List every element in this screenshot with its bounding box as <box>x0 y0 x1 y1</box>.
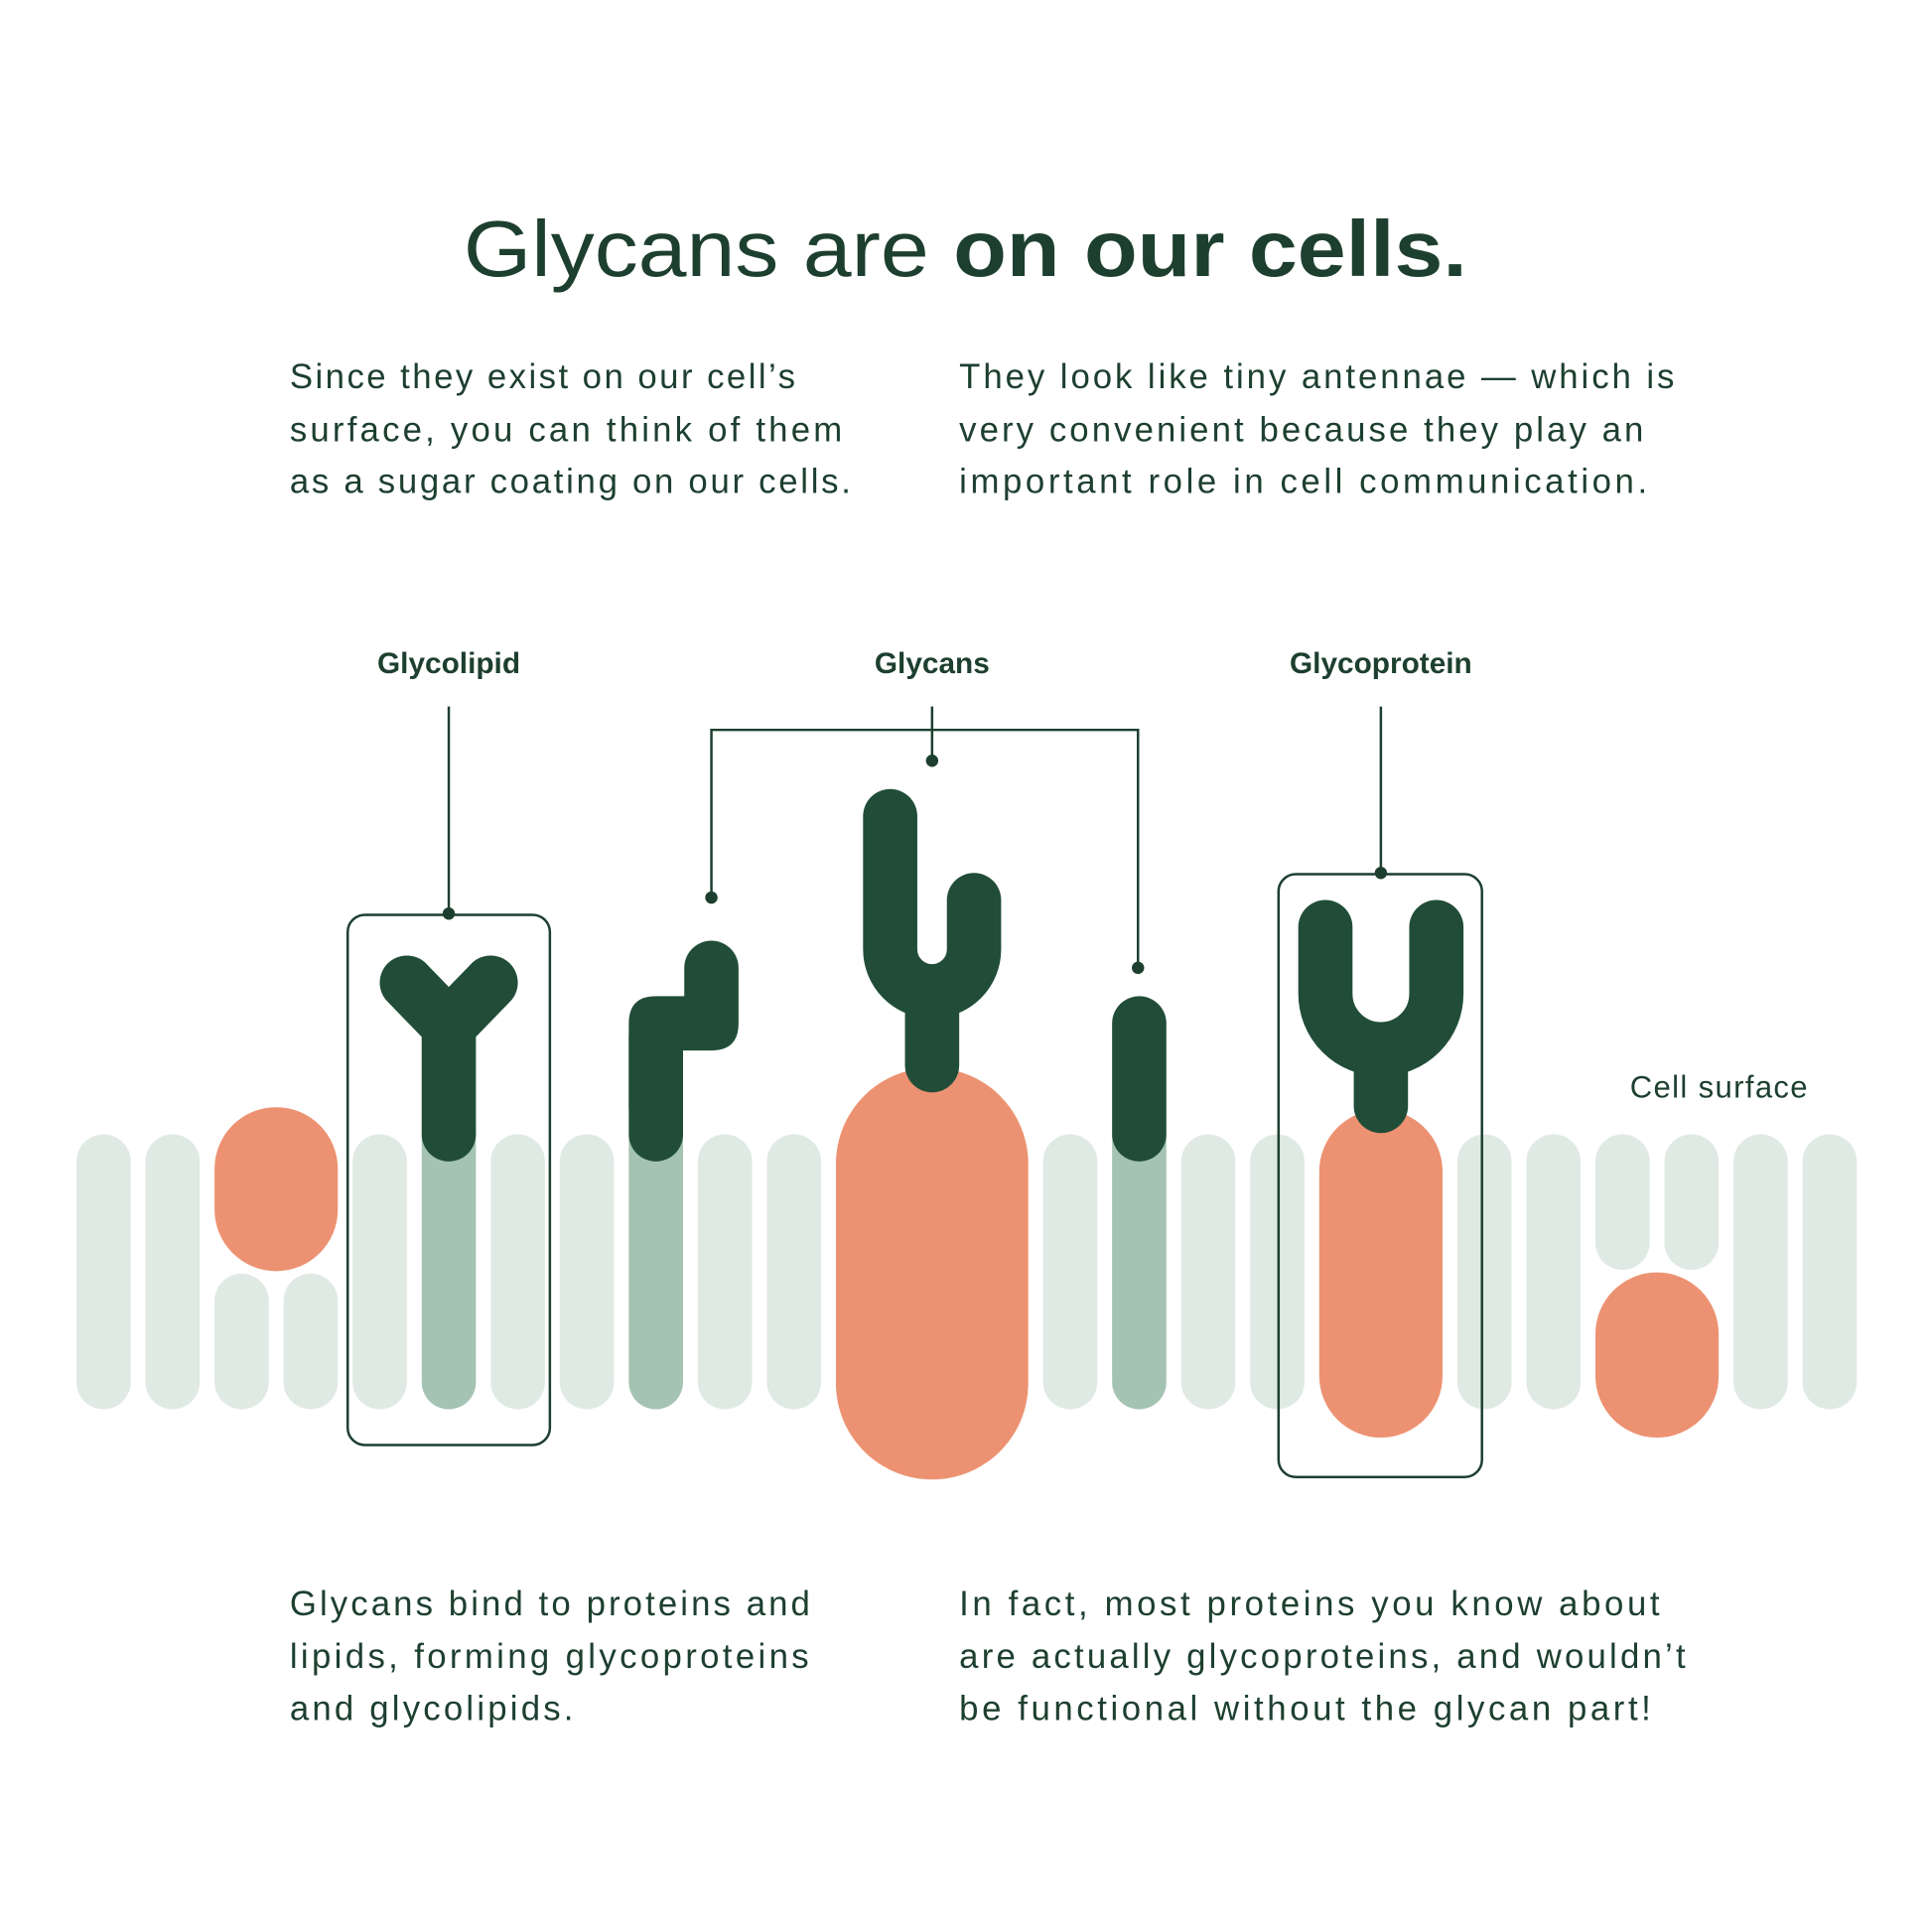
title: Glycans are on our cells. <box>464 205 1467 293</box>
text block: bottom left: lipids, forming glycoproteins <box>290 1638 809 1676</box>
text block: bottom right: be functional without the glycan part! <box>959 1690 1651 1727</box>
text block: top right: very convenient because they play an <box>959 412 1643 450</box>
text block: top left: surface, you can think of them <box>290 412 842 450</box>
text block: bottom left: Glycans bind to proteins and <box>290 1586 810 1623</box>
proteins <box>214 1067 1719 1479</box>
text block: bottom left <box>290 1586 810 1727</box>
text block: top left <box>290 358 851 501</box>
text block: top right: They look like tiny antennae — which is <box>959 358 1674 396</box>
text block: top left: as a sugar coating on our cells. <box>290 464 851 501</box>
text block: bottom right: are actually glycoproteins, and wouldn’t <box>959 1638 1686 1676</box>
text block: bottom right: In fact, most proteins you know about <box>959 1586 1660 1623</box>
label: glycans: Glycans <box>875 647 990 680</box>
text block: top right: important role in cell communication. <box>959 464 1647 501</box>
text block: top right <box>959 358 1674 501</box>
label: glycoprotein: Glycoprotein <box>1290 647 1472 680</box>
text block: bottom left: and glycolipids. <box>290 1690 573 1727</box>
glycan step shape <box>628 941 739 1110</box>
callout lines <box>347 707 1482 1477</box>
label: glycolipid: Glycolipid <box>377 647 520 680</box>
label: cell surface: Cell surface <box>1630 1069 1808 1104</box>
text block: top left: Since they exist on our cell’s <box>290 358 795 396</box>
lipid tails <box>422 1110 1167 1409</box>
glycans <box>407 816 1437 1135</box>
membrane bars <box>76 1135 1857 1409</box>
text block: bottom right <box>959 1586 1686 1727</box>
